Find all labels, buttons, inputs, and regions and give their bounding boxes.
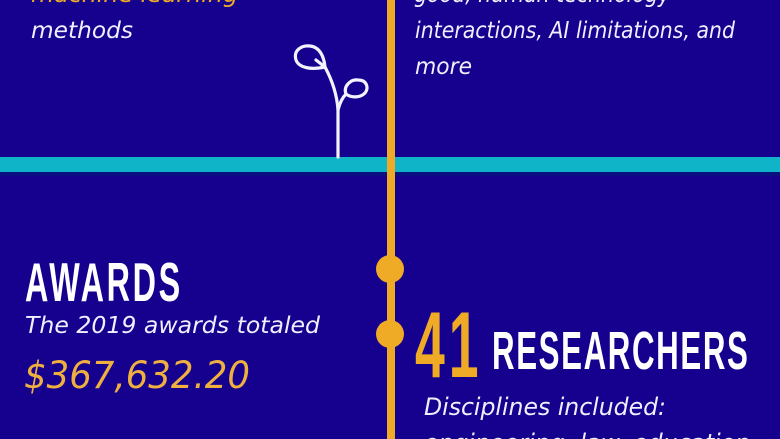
teal horizontal band xyxy=(0,157,780,176)
text block: research topics: interactions, AI limitations, and xyxy=(415,18,735,44)
heading: awards: AWARDS xyxy=(25,251,183,313)
orange vertical timeline with two nodes xyxy=(376,0,404,439)
text: disciplines label: Disciplines included: xyxy=(424,393,666,421)
number: 41: 41 xyxy=(415,293,483,398)
number: awards total: $367,632.20 xyxy=(24,354,250,397)
text block: research topics: more xyxy=(415,54,472,80)
panel: awards xyxy=(24,251,320,397)
text: awards total label: The 2019 awards totaled xyxy=(25,313,320,339)
text block: research topics xyxy=(414,0,735,80)
heading: researchers: RESEARCHERS xyxy=(492,321,750,381)
icon: white sprout xyxy=(295,46,367,157)
text block: machine learning methods: methods xyxy=(31,18,133,44)
panel: researchers xyxy=(415,293,750,439)
text block: machine learning methods xyxy=(31,0,238,44)
